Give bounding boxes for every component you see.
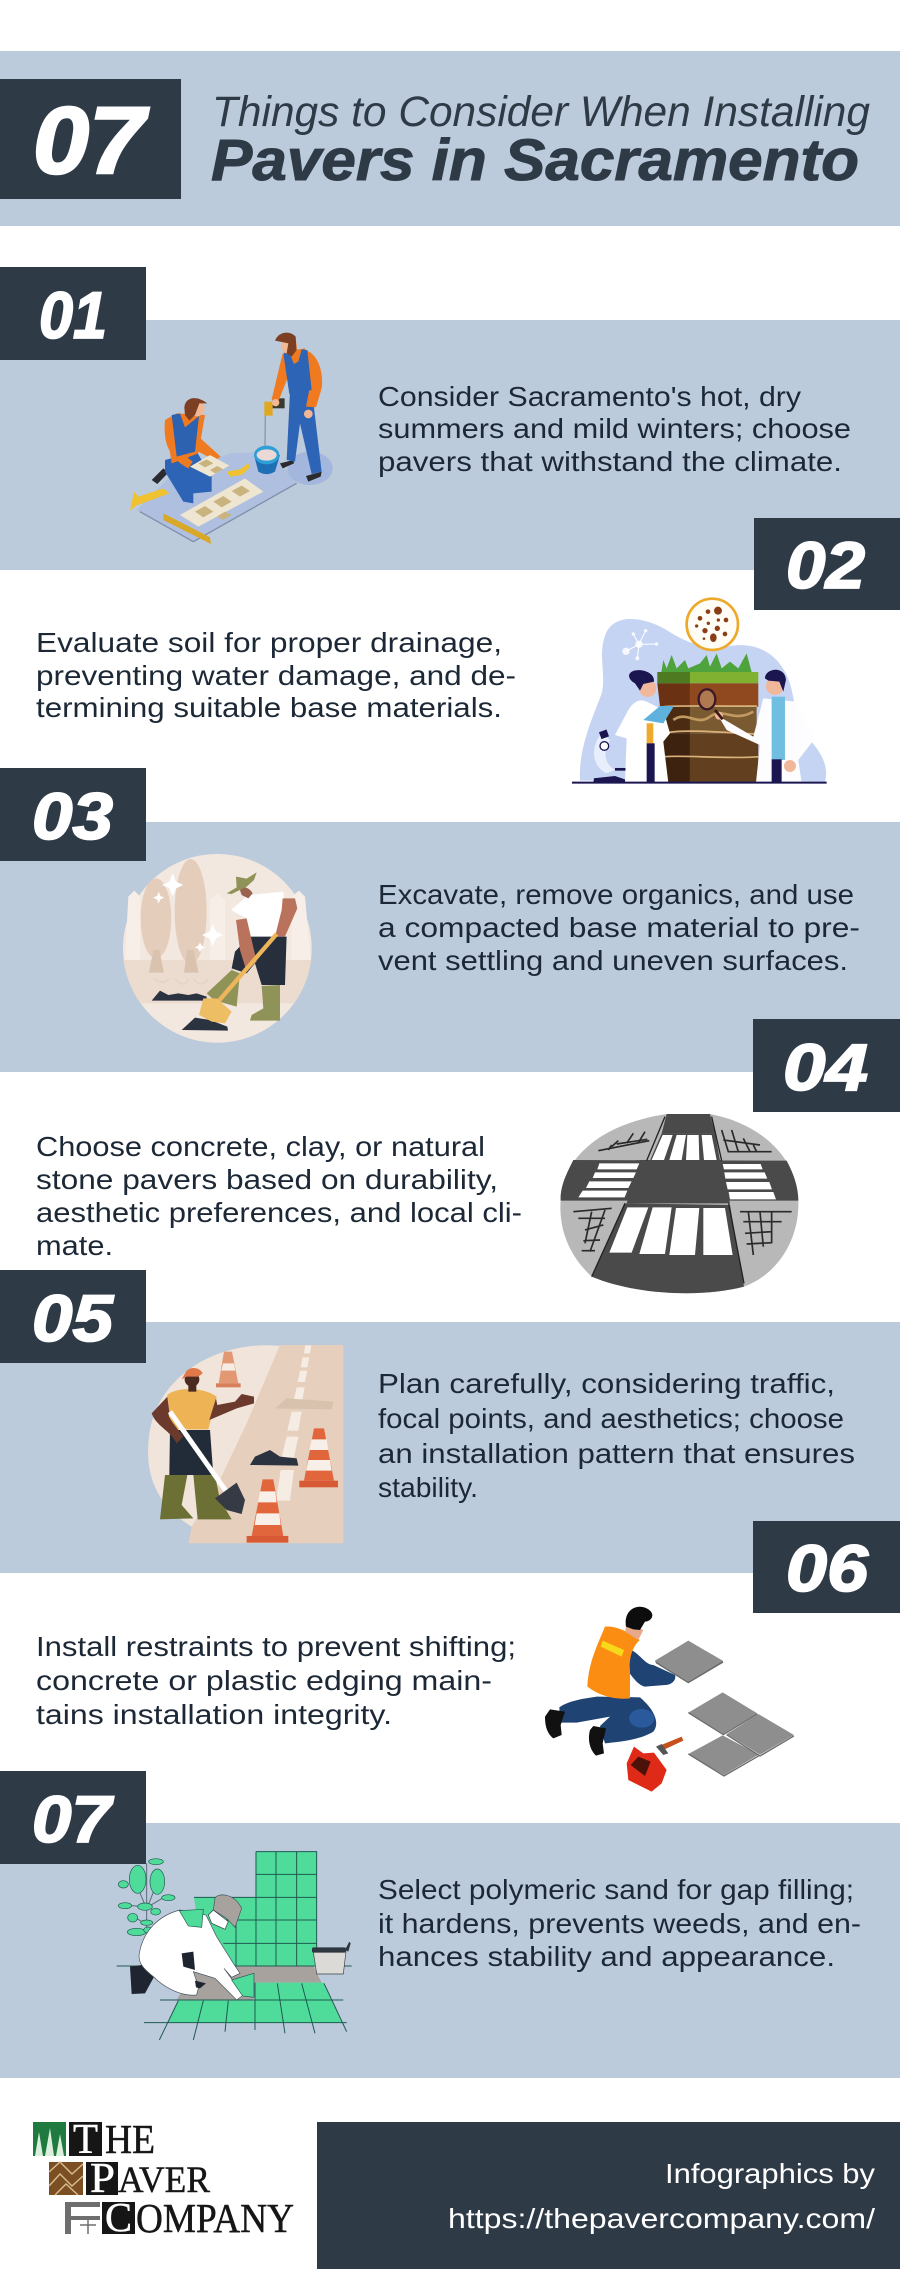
text: step 6 bbox=[36, 1631, 516, 1730]
badge: 02: 02 bbox=[786, 528, 865, 602]
badge: 05: 05 bbox=[32, 1281, 114, 1355]
female scientist bbox=[615, 670, 674, 783]
logo: The Paver Company: T bbox=[73, 2117, 98, 2163]
text: step 7 bbox=[378, 1874, 861, 1972]
badge: 03: 03 bbox=[32, 779, 113, 853]
text: step 3: a compacted base material to pre- bbox=[378, 912, 860, 943]
icon: scientists examining soil bbox=[572, 599, 827, 783]
text: step 4: mate. bbox=[36, 1230, 113, 1261]
badge: 01: 01 bbox=[39, 278, 107, 352]
text: step 5: focal points, and aesthetics; choose bbox=[378, 1403, 844, 1434]
badge: 07 bbox=[0, 1771, 146, 1864]
text: step 4 bbox=[36, 1131, 522, 1261]
badge: 07: 07 bbox=[32, 1782, 115, 1856]
text: step 6: Install restraints to prevent shifting; bbox=[36, 1631, 516, 1662]
badge: 03 bbox=[0, 768, 146, 861]
cone: top bbox=[216, 1352, 241, 1387]
text: step 4: stone pavers based on durability, bbox=[36, 1164, 498, 1195]
header banner bbox=[0, 51, 900, 226]
footer credit box: Infographics by bbox=[665, 2158, 875, 2189]
plant bbox=[118, 1859, 175, 1936]
text: step 7: it hardens, prevents weeds, and en- bbox=[378, 1908, 861, 1939]
text: step 5: Plan carefully, considering traffic, bbox=[378, 1368, 835, 1399]
panel: step 1 background bbox=[0, 320, 900, 570]
text: step 5: stability. bbox=[378, 1472, 478, 1503]
icon: worker placing floor tiles bbox=[545, 1607, 794, 1792]
text: step 7: hances stability and appearance. bbox=[378, 1941, 835, 1972]
text: step 3: Excavate, remove organics, and use bbox=[378, 879, 854, 910]
icon: crosswalk intersection bbox=[560, 1114, 798, 1293]
cone: bottom bbox=[247, 1479, 288, 1543]
panel: step 3 background bbox=[0, 822, 900, 1072]
title bbox=[211, 88, 870, 193]
text: step 6: tains installation integrity. bbox=[36, 1699, 392, 1730]
text: step 1 bbox=[378, 381, 851, 477]
icon: road worker with cones bbox=[148, 1345, 343, 1543]
logo: The Paver Company: AVER bbox=[118, 2160, 210, 2201]
panel: step 7 background bbox=[0, 1823, 900, 2078]
text: step 2: Evaluate soil for proper drainage, bbox=[36, 627, 502, 658]
text: step 3 bbox=[378, 879, 860, 976]
bucket bbox=[312, 1942, 351, 1974]
text: step 2: preventing water damage, and de- bbox=[36, 660, 516, 691]
text: step 1: pavers that withstand the climate. bbox=[378, 446, 842, 477]
logo: The Paver Company: HE bbox=[105, 2116, 155, 2162]
badge: 02 bbox=[754, 518, 900, 610]
badge: 01 bbox=[0, 267, 146, 360]
worker bbox=[130, 1895, 254, 2000]
logo: The Paver Company: C bbox=[105, 2194, 132, 2240]
text: step 5 bbox=[378, 1368, 855, 1503]
badge: 04 bbox=[753, 1019, 900, 1112]
title: Things to Consider When Installing bbox=[212, 88, 870, 136]
microscope bbox=[593, 730, 627, 783]
badge: 06 bbox=[753, 1521, 900, 1613]
header number badge bbox=[0, 79, 181, 199]
text: step 1: Consider Sacramento's hot, dry bbox=[378, 381, 801, 412]
badge: 05 bbox=[0, 1270, 146, 1363]
logo mark: paver tile bbox=[49, 2162, 83, 2195]
text: step 4: aesthetic preferences, and local cli- bbox=[36, 1197, 522, 1228]
footer credit box: https://thepavercompany.com/ bbox=[448, 2203, 875, 2234]
logo: The Paver Company bbox=[33, 2116, 294, 2241]
logo mark: edging tile bbox=[65, 2202, 100, 2234]
panel: step 5 background bbox=[0, 1322, 900, 1573]
logo: The Paver Company: OMPANY bbox=[136, 2195, 294, 2241]
cone: right bbox=[299, 1428, 338, 1487]
text: step 1: summers and mild winters; choose bbox=[378, 413, 851, 444]
title: Pavers in Sacramento bbox=[211, 128, 859, 193]
text: step 5: an installation pattern that ensures bbox=[378, 1438, 855, 1469]
icon: two workers laying tiles bbox=[130, 333, 333, 544]
text: step 6: concrete or plastic edging main- bbox=[36, 1665, 492, 1696]
badge: 06: 06 bbox=[786, 1531, 869, 1605]
text: step 4: Choose concrete, clay, or natural bbox=[36, 1131, 485, 1162]
text: step 2 bbox=[36, 627, 516, 723]
icon: worker digging with shovel bbox=[123, 854, 312, 1043]
icon: worker laying green wall and floor tiles bbox=[117, 1852, 352, 2040]
badge: 04: 04 bbox=[783, 1030, 868, 1104]
text: step 7: Select polymeric sand for gap filling; bbox=[378, 1874, 854, 1905]
logo: The Paver Company: P bbox=[90, 2156, 115, 2202]
text: step 2: termining suitable base materials. bbox=[36, 692, 502, 723]
male scientist bbox=[699, 670, 815, 783]
logo mark: grass tile bbox=[33, 2122, 66, 2156]
text: step 3: vent settling and uneven surfaces. bbox=[378, 945, 848, 976]
header number badge: 07 bbox=[33, 88, 149, 194]
footer credit box bbox=[317, 2122, 900, 2269]
